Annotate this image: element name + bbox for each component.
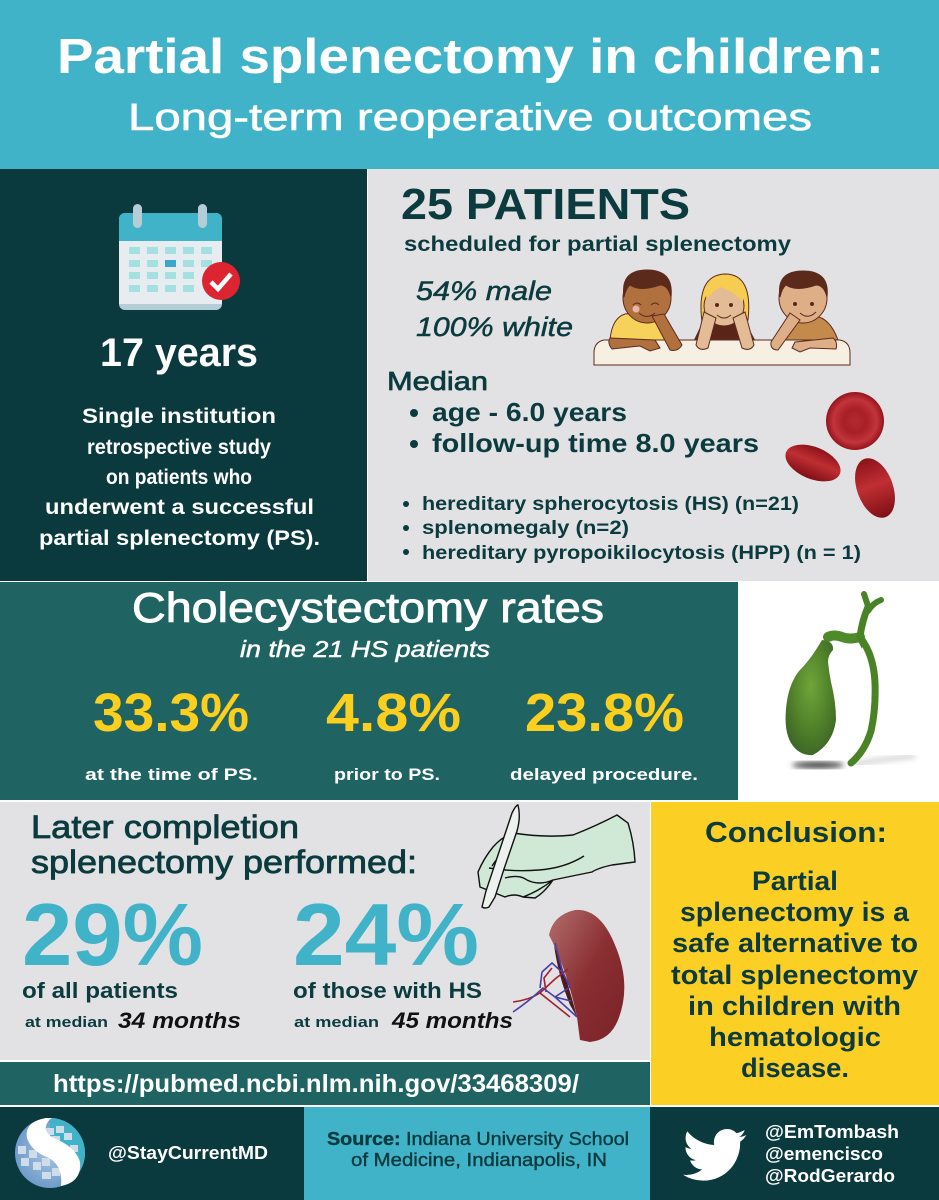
demographics: 100% white <box>416 312 573 342</box>
header banner <box>0 0 939 169</box>
completion heading: Later completion <box>31 809 299 845</box>
stat: HS patients: at median <box>294 1014 379 1031</box>
icon: StayCurrent logo <box>15 1118 85 1188</box>
stat: HS patients: 24% <box>293 885 479 984</box>
title: Partial splenectomy in children: <box>57 30 884 84</box>
stat: all patients: 34 months <box>118 1008 241 1033</box>
panel: completion splenectomy <box>0 802 650 1060</box>
panel: patients <box>368 169 939 581</box>
conclusion text: splenectomy is a <box>680 897 910 927</box>
study description: underwent a successful <box>45 496 314 519</box>
footer: source: Source: Indiana University School <box>327 1129 629 1149</box>
completion heading: splenectomy performed: <box>31 844 417 880</box>
source link band: https://pubmed.ncbi.nlm.nih.gov/33468309/ <box>53 1070 579 1098</box>
conclusion text <box>671 866 918 1083</box>
study description: Single institution <box>82 405 276 428</box>
diagnoses list: splenomegaly (n=2) <box>422 518 629 539</box>
stat: HS patients <box>293 885 513 1033</box>
diagnoses list: hereditary spherocytosis (HS) (n=21) <box>422 494 799 515</box>
stat: delayed procedure <box>510 683 698 784</box>
duration heading: 17 years <box>100 331 258 375</box>
median stats <box>410 397 759 458</box>
panel: cholecystectomy rates <box>0 582 738 800</box>
cholecystectomy heading: Cholecystectomy rates <box>132 584 604 631</box>
image panel: gallbladder <box>739 582 939 800</box>
study description <box>39 405 320 550</box>
source link band <box>0 1062 650 1105</box>
stat: HS patients: of those with HS <box>293 978 482 1003</box>
study description: partial splenectomy (PS). <box>39 527 320 550</box>
diagnoses list: hereditary pyropoikilocytosis (HPP) (n = 1) <box>422 543 861 564</box>
handle: @StayCurrentMD <box>108 1143 268 1163</box>
stat: at the time of PS: 33.3% <box>93 683 249 743</box>
illustration: spleen with vessels <box>513 910 624 1042</box>
stat: delayed procedure: 23.8% <box>525 683 684 743</box>
median stats: age - 6.0 years <box>432 397 627 427</box>
stat: all patients <box>22 885 241 1033</box>
stat: prior to PS: prior to PS. <box>334 765 440 784</box>
stat: at the time of PS: at the time of PS. <box>85 765 258 784</box>
subtitle: Long-term reoperative outcomes <box>128 97 812 139</box>
handles <box>765 1122 899 1186</box>
illustration: three children <box>594 270 850 365</box>
conclusion text: total splenectomy <box>671 960 918 990</box>
demographics: 54% male <box>416 276 552 306</box>
diagnoses list <box>403 494 861 564</box>
conclusion heading: Conclusion: <box>705 817 887 849</box>
panel: conclusion <box>651 802 939 1105</box>
footer: twitter <box>650 1107 939 1200</box>
handles: @RodGerardo <box>765 1166 895 1186</box>
footer: source <box>304 1107 650 1200</box>
stat: HS patients: 45 months <box>391 1008 513 1033</box>
cholecystectomy subheading: in the 21 HS patients <box>240 636 491 662</box>
study description: retrospective study <box>87 436 271 459</box>
stat: all patients: at median <box>25 1014 108 1031</box>
illustration: gloved hand with scalpel <box>478 805 635 908</box>
patients subheading: scheduled for partial splenectomy <box>404 232 791 256</box>
median stats: follow-up time 8.0 years <box>432 428 759 458</box>
conclusion text: in children with <box>688 991 901 1021</box>
stat: all patients: of all patients <box>22 978 178 1003</box>
handles: @EmTombash <box>765 1122 899 1142</box>
patients heading: 25 PATIENTS <box>401 180 690 229</box>
conclusion text: hematologic <box>709 1022 881 1052</box>
conclusion text: disease. <box>741 1053 849 1083</box>
stat: delayed procedure: delayed procedure. <box>510 765 698 784</box>
handles: @emencisco <box>765 1144 883 1164</box>
study description: on patients who <box>106 466 252 489</box>
conclusion text: Partial <box>752 866 838 896</box>
icon: twitter bird <box>683 1129 746 1181</box>
icon: calendar with check <box>119 204 240 310</box>
stat: prior to PS <box>326 683 461 784</box>
conclusion text: safe alternative to <box>672 928 918 958</box>
completion heading <box>31 809 417 880</box>
stat: prior to PS: 4.8% <box>326 683 461 743</box>
footer: Stay Current <box>0 1107 304 1200</box>
icon: red blood cells <box>780 392 903 523</box>
footer: source: of Medicine, Indianapolis, IN <box>351 1150 607 1170</box>
stat: all patients: 29% <box>22 885 203 984</box>
stat: at the time of PS <box>85 683 258 784</box>
demographics <box>416 276 573 342</box>
panel: study duration <box>0 169 367 581</box>
median heading: Median <box>387 366 488 396</box>
